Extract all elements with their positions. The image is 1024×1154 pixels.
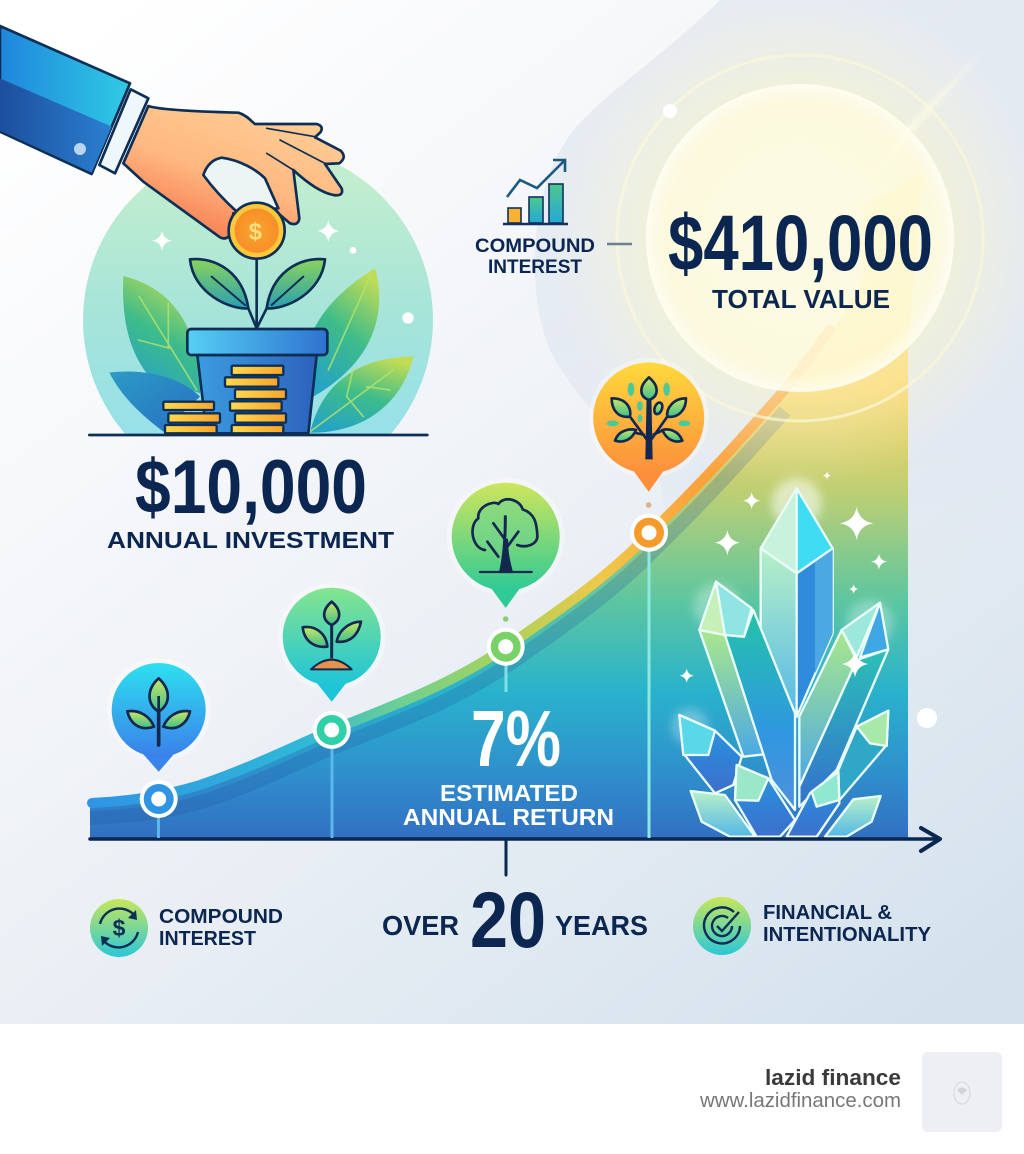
connector dash (607, 243, 632, 245)
over 20 years: YEARS (555, 910, 648, 941)
legend: compound interest (90, 899, 283, 957)
icon: rising bar chart (503, 160, 568, 224)
axis arrow (90, 828, 940, 875)
coin stacks (163, 366, 286, 433)
central crystal (761, 488, 833, 717)
sparkles (679, 472, 887, 683)
background halo behind total value (535, 0, 1024, 720)
over 20 years: 20 (470, 875, 546, 964)
annual investment amount: $10,000 (135, 445, 367, 530)
7 percent: 7% (471, 694, 561, 783)
milestone 2: seedling pin (278, 583, 386, 749)
sprout icon (127, 678, 190, 745)
young tree icon (607, 377, 690, 459)
compound interest label (475, 236, 595, 278)
total value sun glow (550, 0, 1024, 728)
growth area chart (90, 173, 922, 838)
coin: $ (249, 218, 262, 245)
marker (630, 514, 668, 552)
compound interest label: COMPOUND (475, 236, 595, 257)
milestone 4: young tree pin (589, 358, 709, 552)
growth curve line (92, 330, 830, 803)
legend: compound interest: INTEREST (159, 928, 256, 950)
marker (487, 628, 525, 666)
over 20 years: OVER (382, 910, 459, 941)
hand (123, 106, 344, 238)
crystal cluster (672, 472, 893, 837)
legend: financial intentionality: FINANCIAL & (763, 902, 892, 924)
legend: compound interest: COMPOUND (159, 906, 283, 928)
sparkles (152, 220, 414, 324)
ground line (89, 431, 427, 439)
legend: financial intentionality (693, 897, 932, 955)
icon: target check (693, 897, 751, 955)
lower left crystal (679, 715, 742, 793)
large leaves (109, 268, 413, 433)
total value label: TOTAL VALUE (712, 284, 890, 314)
website: www.lazidfinance.com (699, 1090, 901, 1112)
estimated annual return label (403, 780, 614, 830)
over 20 years (382, 875, 648, 964)
footer (0, 1024, 1024, 1154)
tree icon (473, 499, 537, 572)
pot (187, 329, 327, 433)
estimated annual return label: ANNUAL RETURN (403, 804, 614, 830)
seedling icon (303, 602, 361, 669)
lower right crystal (837, 711, 888, 803)
return rate (403, 694, 614, 830)
legend: financial intentionality: INTENTIONALITY (763, 924, 932, 946)
plant stem and leaves (190, 259, 325, 328)
logo tile (922, 1052, 1002, 1132)
compound interest label: INTEREST (488, 257, 582, 278)
coin (229, 203, 285, 259)
sleeve (0, 26, 148, 174)
base crystals (691, 765, 881, 837)
hand, plant and coins illustration (0, 26, 427, 435)
annual investment label: ANNUAL INVESTMENT (107, 527, 394, 553)
milestone 1: sprout pin (107, 658, 211, 818)
estimated annual return label: ESTIMATED (440, 780, 578, 806)
right crystal (799, 603, 888, 807)
total value amount: $410,000 (668, 198, 933, 287)
marker (140, 780, 178, 818)
left crystal (699, 582, 795, 810)
icon: circular dollar (90, 899, 148, 957)
marker (313, 711, 351, 749)
brand name: lazid finance (765, 1065, 901, 1090)
milestone stems (158, 545, 649, 838)
plant circle backdrop (83, 164, 433, 434)
icon: circular dollar: $ (113, 915, 126, 941)
milestone 3: tree pin (447, 478, 565, 666)
